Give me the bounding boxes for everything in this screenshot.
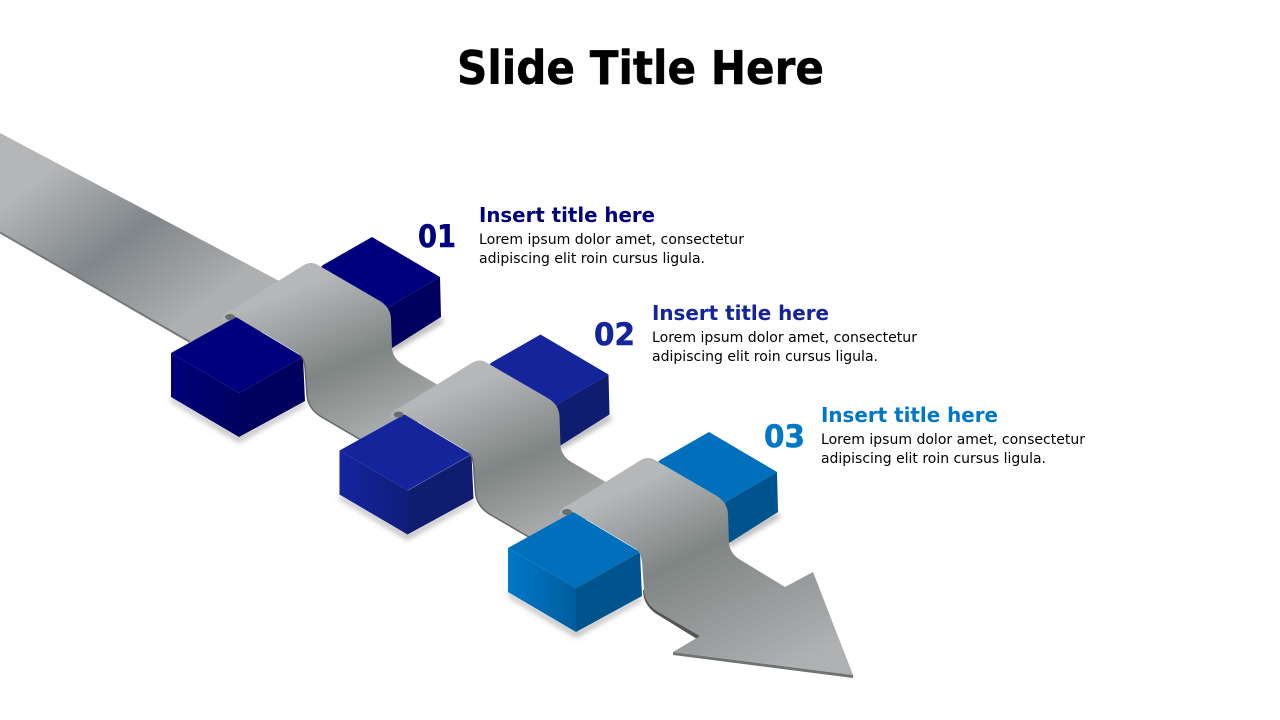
step 02 text: Insert title here xyxy=(652,301,829,325)
step 01 text xyxy=(479,203,744,267)
unit 3: back block xyxy=(653,432,780,547)
step 01 number: 01 xyxy=(418,219,456,255)
step 03 number: 03 xyxy=(764,419,805,455)
step 03 text: Lorem ipsum dolor amet, consectetur xyxy=(821,432,1085,448)
unit 1: front block xyxy=(171,317,305,442)
unit 2: raised band over block xyxy=(390,360,618,552)
step 02 text xyxy=(652,301,917,365)
unit 1: raised band over block xyxy=(222,263,450,454)
step 03 text: Insert title here xyxy=(821,403,998,427)
step 01 text: adipiscing elit roin cursus ligula. xyxy=(479,251,705,267)
step 01 text: Insert title here xyxy=(479,203,655,227)
step 01 text: Lorem ipsum dolor amet, consectetur xyxy=(479,232,744,248)
step 03 text: adipiscing elit roin cursus ligula. xyxy=(821,451,1046,467)
step 02 text: Lorem ipsum dolor amet, consectetur xyxy=(652,330,917,346)
step 02 text: adipiscing elit roin cursus ligula. xyxy=(652,349,878,365)
unit 2: back block xyxy=(484,334,612,450)
unit 3: raised band and arrow head xyxy=(559,458,853,678)
incoming flat arrow strip xyxy=(0,133,300,364)
step 02 number: 02 xyxy=(594,317,635,353)
step 03 text xyxy=(821,403,1085,467)
unit 1: back block xyxy=(316,237,443,352)
unit 2: front block xyxy=(340,414,474,540)
title: Slide Title Here xyxy=(457,41,824,95)
unit 3: front block xyxy=(508,512,642,637)
